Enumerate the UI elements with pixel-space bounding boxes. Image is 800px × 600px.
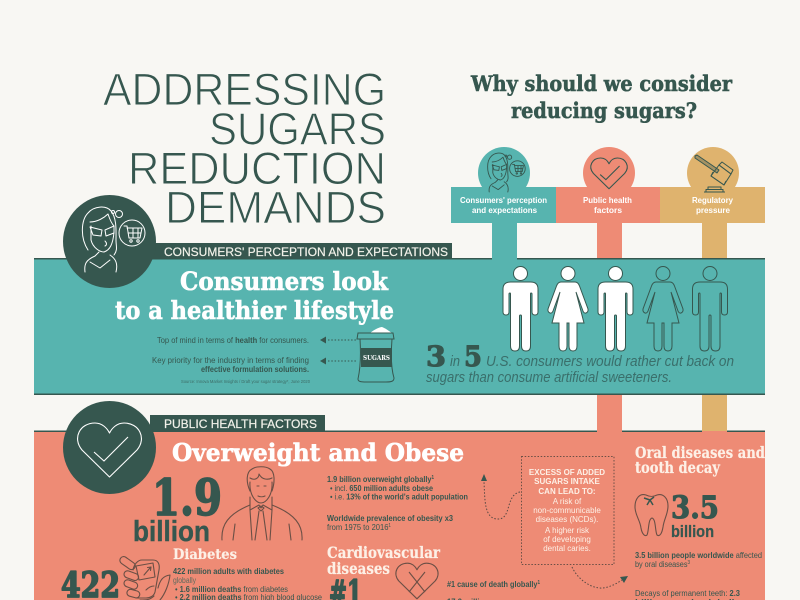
statistic: 3.5 billion: 3.5 (671, 490, 719, 526)
statistic: 1.9 billion: 1.9 (152, 468, 222, 527)
icon: hand with glucose meter (118, 555, 170, 600)
callout: excess sugars (522, 456, 614, 564)
statistic: 3.5 billion (671, 490, 719, 541)
callout: excess sugars: CAN LEAD TO: (538, 487, 596, 496)
callout: excess sugars: A higher risk (545, 526, 590, 535)
text: oral facts: by oral diseases (635, 560, 693, 569)
text: key points: effective formulation solutions. (201, 364, 309, 374)
text: overweight facts: • incl. 650 million adults obese (330, 484, 433, 493)
heading: why reduce sugars: Why should we consider (470, 71, 733, 96)
title: DEMANDS (165, 182, 386, 233)
heading: why reduce sugars: reducing sugars? (511, 98, 697, 123)
title (103, 64, 386, 233)
statistic: 1.9 billion (133, 468, 222, 548)
section icon (63, 401, 156, 494)
icon: sugar bag: SUGARS (363, 354, 390, 362)
statistic: 3.5 billion: billion (671, 522, 714, 541)
statistic: 3 in 5 (426, 340, 734, 386)
heading: cardiovascular diseases: diseases (327, 559, 390, 578)
statistic: 3 in 5: 5 (464, 340, 482, 373)
callout: excess sugars: A risk of (553, 497, 582, 506)
arrow: callout to obesity (481, 474, 520, 519)
pillar: consumers' perception (451, 147, 556, 263)
icon: tooth (635, 495, 668, 536)
statistic: 3 in 5: sugars than consume artificial sweeteners. (426, 369, 672, 386)
heading: Consumers look (180, 267, 389, 296)
title: REDUCTION (128, 143, 386, 194)
callout: excess sugars: diseases (NCDs). (536, 515, 598, 524)
text: cardiovascular facts (447, 580, 540, 600)
statistic: 3 in 5: in (450, 353, 460, 370)
text: overweight facts: 1 (432, 475, 434, 481)
label (583, 196, 632, 215)
text: key points (152, 335, 310, 384)
callout: excess sugars: non-communicable (533, 506, 601, 515)
title: SUGARS (209, 104, 386, 154)
arrows to key points (320, 336, 356, 364)
heading: cardiovascular diseases (327, 543, 440, 578)
callout: excess sugars: EXCESS OF ADDED (529, 468, 605, 477)
arrow: callout to oral diseases (572, 567, 628, 588)
label (460, 196, 547, 215)
callout: excess sugars: dental caries. (543, 544, 591, 553)
text: cardiovascular facts: 1 (537, 580, 540, 586)
heading: cardiovascular diseases: Cardiovascular (327, 543, 440, 562)
panel: public health band (34, 401, 765, 600)
label (692, 196, 734, 215)
section label: PUBLIC HEALTH FACTORS (164, 417, 317, 431)
text: diabetes facts (173, 567, 323, 600)
heading: overweight and obese: Overweight and Obese (172, 438, 464, 467)
heading: to a healthier lifestyle (115, 296, 394, 325)
icon: woman with cart (488, 153, 525, 192)
text: diabetes facts: • 1.6 million deaths from diabetes (175, 585, 288, 594)
text: overweight facts: 1.9 billion overweight globally (327, 475, 443, 484)
label: Regulatory (692, 196, 734, 205)
label: Consumers' perception (460, 196, 547, 205)
text: oral facts (635, 551, 762, 600)
text: overweight facts: • i.e. 13% of the world's adult population (330, 492, 468, 502)
section label: CONSUMERS' PERCEPTION AND EXPECTATIONS (164, 245, 448, 259)
statistic: 1.9 billion: billion (133, 516, 210, 548)
label: pressure (696, 206, 731, 215)
text: oral facts: Decays of permanent teeth: 2.3 (635, 589, 741, 598)
callout: excess sugars: SUGARS INTAKE (534, 477, 600, 486)
label: Public health (583, 196, 632, 205)
callout: excess sugars: of developing (543, 535, 591, 544)
text: overweight facts: Worldwide prevalence of obesity x3 (327, 514, 453, 523)
text: key points: Top of mind in terms of health for consumers. (157, 335, 309, 345)
pillar: regulatory pressure (660, 147, 765, 431)
text: overweight facts: from 1975 to 2016 (327, 523, 393, 532)
text: diabetes facts: 422 million adults with diabetes (173, 567, 285, 576)
icon: man in suit (222, 467, 302, 540)
statistic: 3 in 5: U.S. consumers would rather cut back on (486, 353, 734, 370)
pictogram: 3 of 5 people (503, 266, 728, 351)
heading (115, 267, 394, 325)
text: key points: Key priority for the industry in terms of finding (152, 355, 309, 365)
text: oral facts: 3 (687, 560, 690, 566)
text: diabetes facts: globally (173, 576, 196, 585)
icon: heart with cross (396, 563, 438, 599)
heading: oral diseases: tooth decay (635, 458, 721, 477)
icon: gavel (695, 155, 733, 192)
heading: oral diseases (635, 443, 765, 477)
label: and expectations (472, 206, 538, 215)
icon: heart (591, 158, 627, 189)
text: overweight facts (327, 475, 468, 532)
label: factors (594, 206, 623, 215)
text: overweight facts: 1 (388, 523, 391, 529)
statistic: 3 in 5: 3 (426, 340, 446, 373)
heading: why reduce sugars (470, 71, 733, 123)
title: ADDRESSING (103, 64, 386, 115)
text: cardiovascular facts: #1 cause of death globally (447, 580, 547, 589)
heading: diabetes: Diabetes (173, 547, 237, 563)
section icon (63, 195, 156, 288)
pillar: public health factors (556, 147, 660, 431)
heading: oral diseases: Oral diseases and (635, 443, 765, 462)
text: oral facts: 3.5 billion people worldwide affected (635, 551, 762, 560)
panel: consumers band (34, 195, 765, 395)
text: key points: Source: Innova Market Insights / Draft your sugar strategy*, June 2020 (181, 379, 310, 384)
icon: sugar bag (357, 327, 394, 382)
